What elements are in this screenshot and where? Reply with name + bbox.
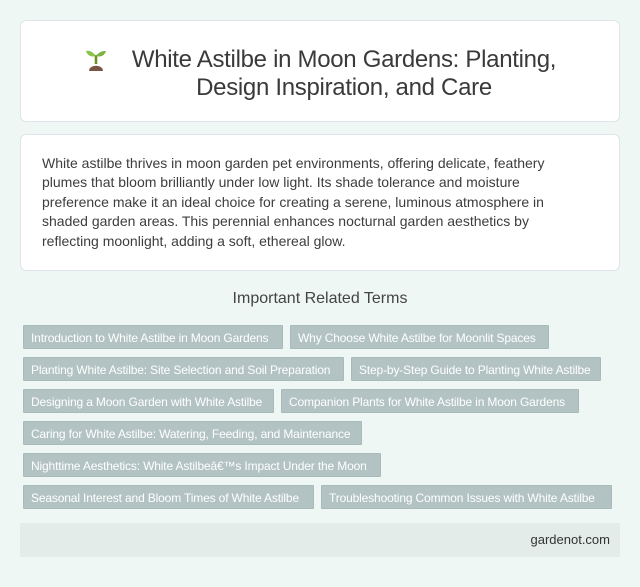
tags: Seasonal Interest and Bloom Times of White Astilbe xyxy=(31,491,299,505)
title xyxy=(132,46,556,101)
tags: Introduction to White Astilbe in Moon Gardens xyxy=(31,331,268,345)
tags: Nighttime Aesthetics: White Astilbeâ€™s Impact Under the Moon xyxy=(31,459,367,473)
tags: Planting White Astilbe: Site Selection and Soil Preparation xyxy=(31,363,330,377)
title: Design Inspiration, and Care xyxy=(196,74,492,101)
description card xyxy=(20,134,620,271)
description text: plumes that bloom brilliantly under low light. Its shade tolerance and moisture xyxy=(42,174,520,190)
title: White Astilbe in Moon Gardens: Planting, xyxy=(132,46,556,73)
tags: Troubleshooting Common Issues with White Astilbe xyxy=(329,491,595,505)
description text: White astilbe thrives in moon garden pet environments, offering delicate, feathery xyxy=(42,155,544,171)
footer xyxy=(20,523,620,557)
tags: Designing a Moon Garden with White Astilbe xyxy=(31,395,262,409)
tags: Caring for White Astilbe: Watering, Feeding, and Maintenance xyxy=(31,427,350,441)
icon: seedling xyxy=(86,50,106,71)
header card xyxy=(20,20,620,122)
description text: preference make it an ideal choice for creating a serene, luminous atmosphere in xyxy=(42,194,544,210)
tags: Why Choose White Astilbe for Moonlit Spaces xyxy=(298,331,536,345)
tags: Step-by-Step Guide to Planting White Astilbe xyxy=(359,363,591,377)
description text: reflecting moonlight, adding a soft, ethereal glow. xyxy=(42,233,346,249)
section heading: Important Related Terms xyxy=(233,290,407,307)
description text: shaded garden areas. This perennial enhances nocturnal garden aesthetics by xyxy=(42,213,529,229)
description text xyxy=(42,155,544,249)
tags: Companion Plants for White Astilbe in Moon Gardens xyxy=(289,395,565,409)
footer source text: gardenot.com xyxy=(530,532,610,547)
